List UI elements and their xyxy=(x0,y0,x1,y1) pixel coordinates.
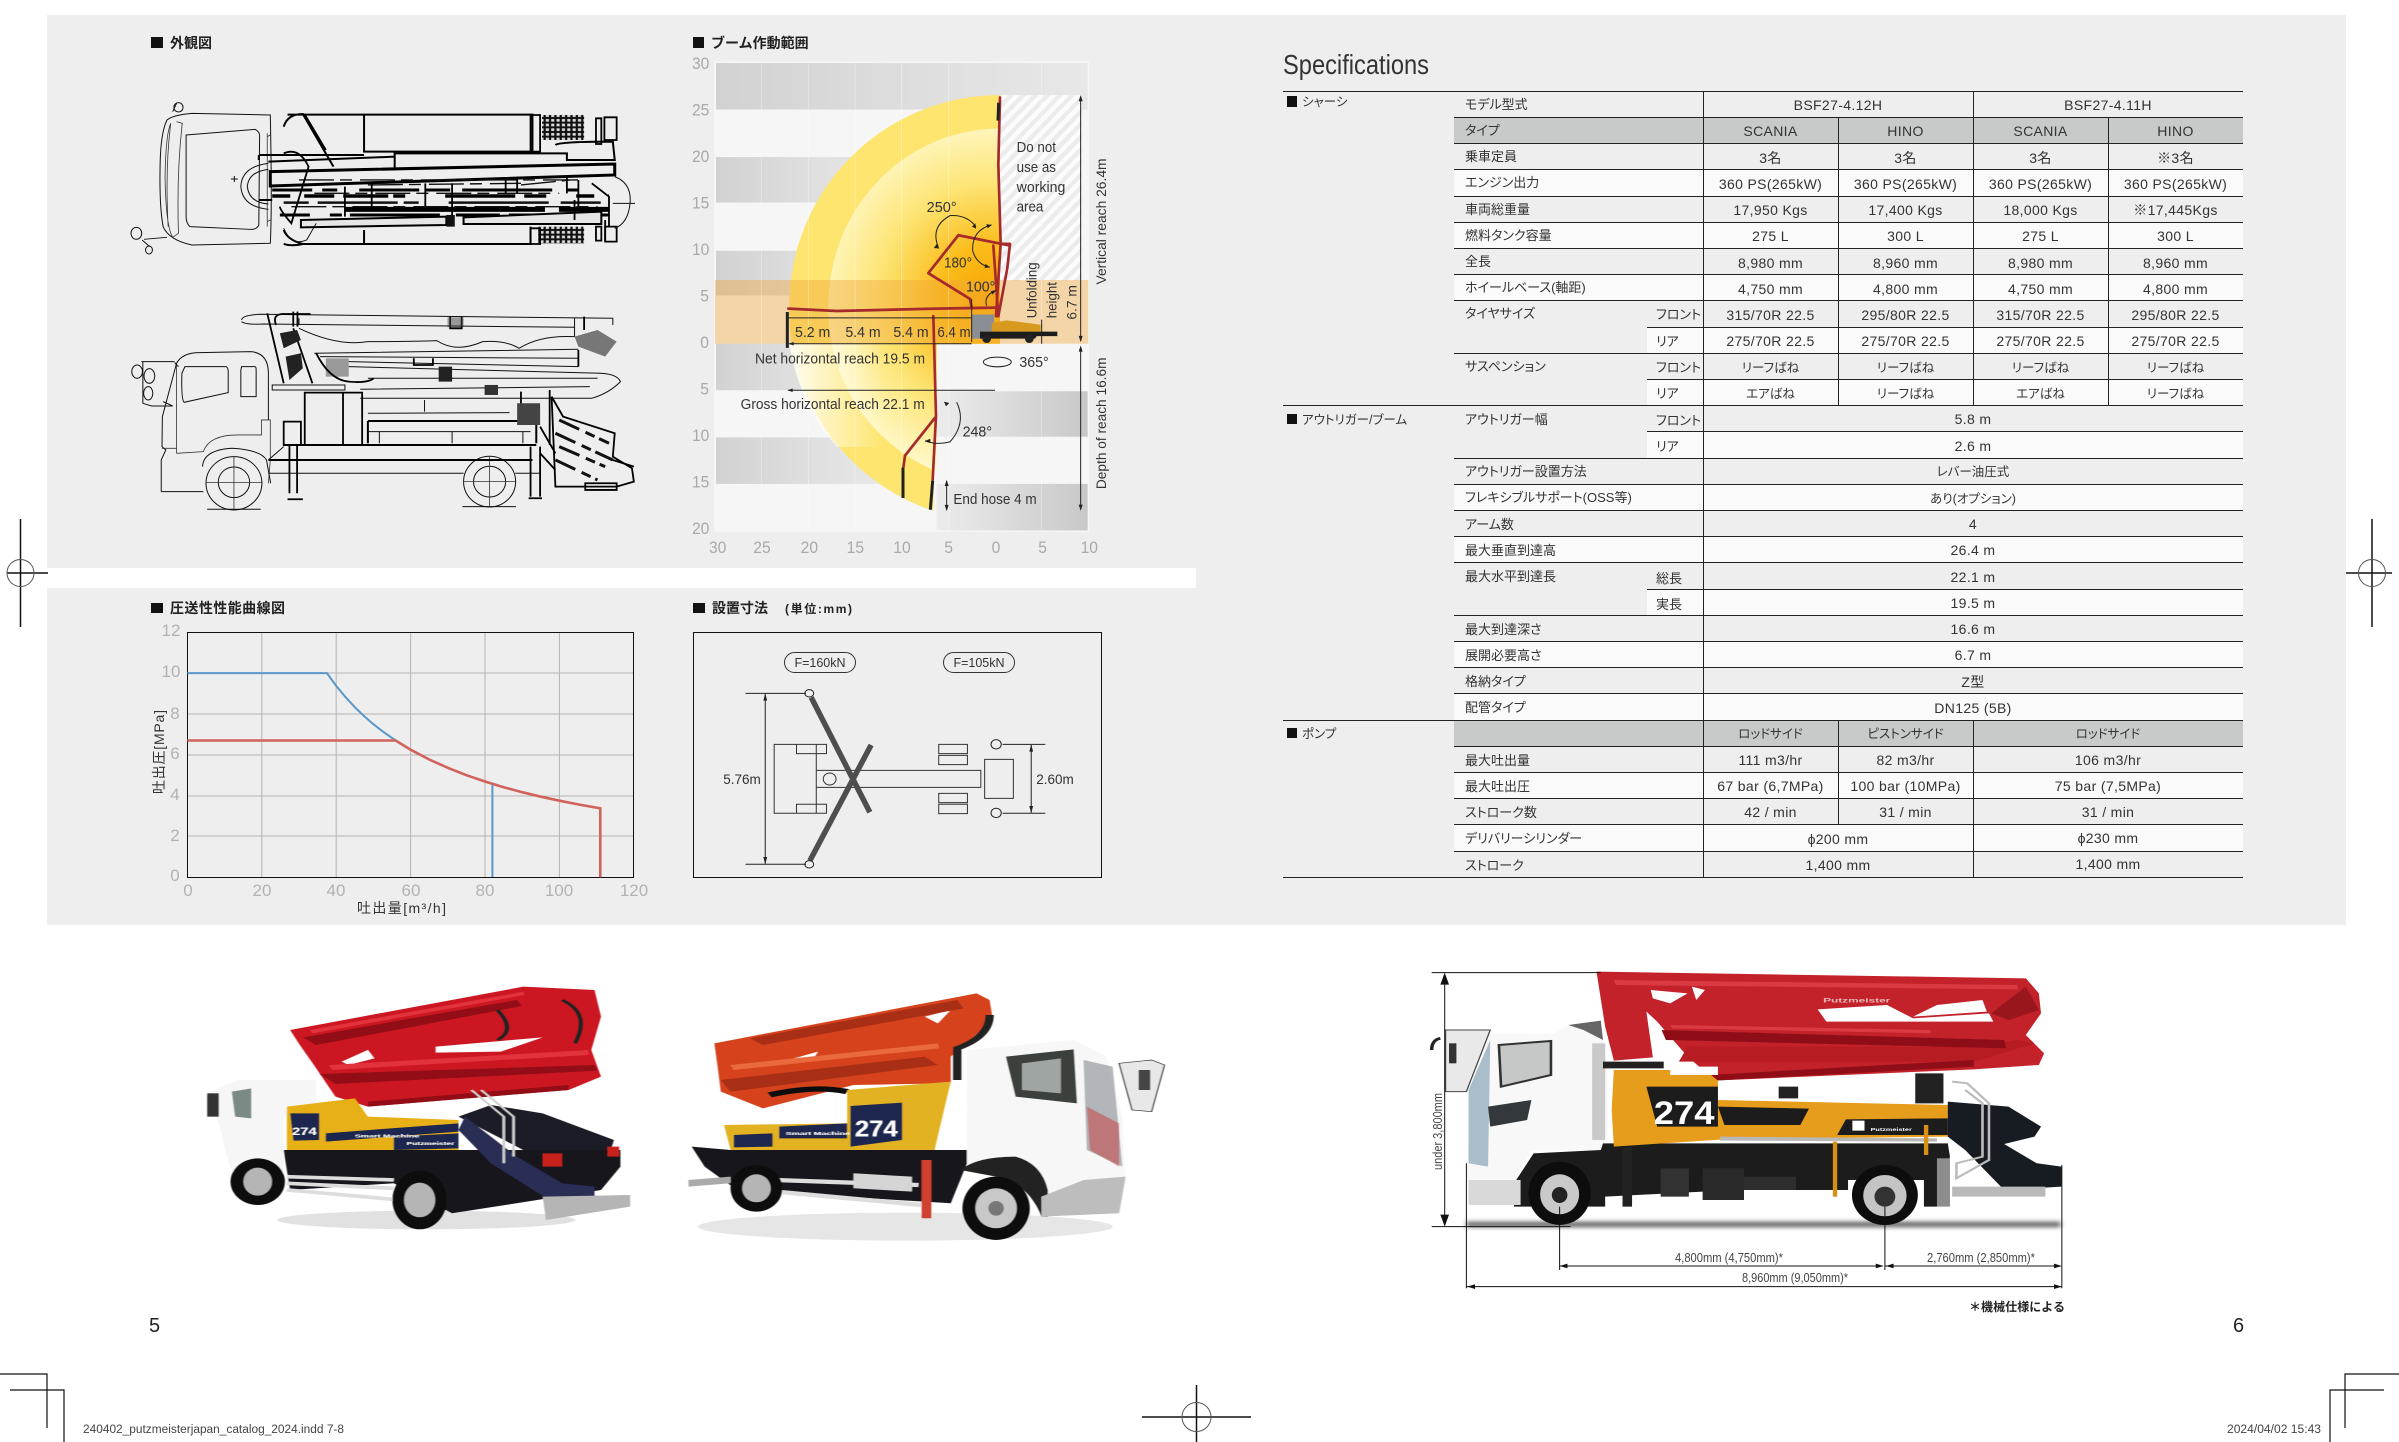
chassis values: リーフばね xyxy=(1877,361,1935,375)
pump values: ϕ230 mm xyxy=(2078,830,2138,846)
category: outrigger and boom: アウトリガー/ブーム xyxy=(1302,412,1407,427)
orange body xyxy=(1612,1070,1948,1147)
row labels: リア xyxy=(1656,386,1679,401)
panel: outrigger setup dimensions xyxy=(693,600,1102,878)
red boom arms xyxy=(1596,972,2044,1081)
print slug: file name: 240402_putzmeisterjapan_catalog_2024.indd 7-8 xyxy=(83,1424,344,1436)
boom diagram labels: working xyxy=(1016,180,1065,196)
label: rear overhang: 2,760mm (2,850mm)* xyxy=(1927,1251,2035,1265)
x axis numbers: 80 xyxy=(476,881,494,900)
panel: boom working range xyxy=(692,35,1110,557)
boom diagram y axis: 25 xyxy=(692,102,710,119)
photo: truck front three-quarter view: 274 xyxy=(855,1115,898,1142)
boom diagram y axis: 20 xyxy=(692,149,710,166)
chassis values: 300 L xyxy=(1887,228,1924,244)
pump values: 31 / min xyxy=(2082,804,2134,820)
curve: piston side blue xyxy=(187,673,492,877)
label: front force xyxy=(784,652,856,672)
truck image: Putzmeister xyxy=(1871,1128,1913,1133)
pump values: ピストンサイド xyxy=(1867,727,1944,741)
boom diagram y axis: 15 xyxy=(692,195,710,212)
boom diagram x axis: 25 xyxy=(753,540,771,557)
row labels: 実長 xyxy=(1656,597,1682,612)
boom diagram y axis: 5 xyxy=(700,381,709,398)
category: chassis: シャーシ xyxy=(1302,95,1348,109)
orange unfolding band xyxy=(715,280,1088,344)
print slug: date: 2024/04/02 15:43 xyxy=(2227,1424,2321,1436)
chassis values: エアばね xyxy=(1746,387,1795,401)
pump values: ϕ200 mm xyxy=(1808,831,1868,847)
outrigger and boom values: レバー油圧式 xyxy=(1937,465,2010,479)
outrigger and boom values: Z型 xyxy=(1961,674,1985,690)
outrigger and boom values: あり(オプション) xyxy=(1930,492,2016,506)
chassis values: 4,800 mm xyxy=(2143,281,2208,297)
chassis values: 275 L xyxy=(1752,228,1789,244)
chassis values: 275/70R 22.5 xyxy=(1861,333,1950,349)
row labels: タイヤサイズ xyxy=(1465,306,1536,321)
chassis values: 315/70R 22.5 xyxy=(1996,307,2085,323)
outrigger and boom values: 5.8 m xyxy=(1955,411,1991,427)
chassis values: SCANIA xyxy=(1743,123,1798,139)
truck image xyxy=(1432,972,2061,1227)
row labels: ストローク xyxy=(1465,858,1524,873)
crop marks bottom left xyxy=(0,1374,64,1442)
boom diagram labels: Depth of reach 16.6m xyxy=(1094,358,1110,489)
drawing: truck side view xyxy=(132,312,634,510)
boom diagram labels: Do not xyxy=(1017,140,1056,156)
x axis numbers: 0 xyxy=(183,881,193,900)
white cab xyxy=(206,1080,316,1187)
yellow body xyxy=(287,1098,459,1152)
note: depends on machine spec: ＊機械仕様による xyxy=(1969,1299,2065,1314)
chassis values: 3名 xyxy=(1894,150,1917,166)
boom diagram x axis: 15 xyxy=(847,540,864,557)
chassis values: 4,750 mm xyxy=(2008,281,2073,297)
row labels: ホイールベース(軸距) xyxy=(1465,280,1586,295)
row labels: 最大到達深さ xyxy=(1465,622,1542,637)
table rules xyxy=(1283,91,2243,878)
boom diagram labels: 248° xyxy=(963,425,992,441)
mini truck xyxy=(972,314,1057,343)
y axis numbers: 10 xyxy=(162,662,180,681)
row labels: 車両総重量 xyxy=(1465,202,1530,217)
photo: truck rear three-quarter view xyxy=(206,987,630,1229)
chassis values: BSF27-4.12H xyxy=(1794,97,1882,113)
y axis numbers: 2 xyxy=(170,826,180,845)
x axis numbers: 100 xyxy=(545,881,573,900)
row labels: 格納タイプ xyxy=(1465,674,1526,689)
label: height: under 3,800mm xyxy=(1430,1093,1445,1170)
y axis numbers: 12 xyxy=(162,621,180,640)
reach measurement lines xyxy=(787,95,1083,511)
chassis values: 275/70R 22.5 xyxy=(1996,333,2085,349)
y axis numbers: 6 xyxy=(170,744,180,763)
outrigger and boom values: 16.6 m xyxy=(1951,621,1995,637)
chassis values xyxy=(1719,97,2227,401)
x axis numbers xyxy=(183,881,648,900)
label: rear force: F=105kN xyxy=(953,656,1005,670)
boom diagram labels: 180° xyxy=(944,255,972,271)
rotation arrows xyxy=(925,216,1011,443)
chassis values: 3名 xyxy=(2029,150,2052,166)
boom diagram x axis: 0 xyxy=(992,540,1000,557)
category: pump xyxy=(1287,727,1337,741)
frame xyxy=(694,632,1102,878)
heading: exterior view: 外観図 xyxy=(170,35,212,51)
row labels: サスペンション xyxy=(1465,359,1546,374)
boom diagram x axis: 10 xyxy=(893,540,911,557)
boom diagram labels: Unfolding xyxy=(1025,262,1041,318)
boom diagram x axis: 20 xyxy=(801,540,818,557)
boom diagram x axis: 30 xyxy=(709,540,727,557)
chassis xyxy=(692,1147,967,1203)
tank and outrigger xyxy=(1703,1168,1744,1200)
page number left: 5 xyxy=(149,1315,160,1337)
boom diagram y axis: 5 xyxy=(700,288,709,305)
chassis values: 360 PS(265kW) xyxy=(2124,176,2227,192)
boom diagram labels: 6.7 m xyxy=(1065,285,1081,320)
x axis numbers: 60 xyxy=(402,881,420,900)
boom diagram labels: Gross horizontal reach 22.1 m xyxy=(741,397,925,413)
photo: truck side view with dimensions xyxy=(1430,972,2065,1314)
chassis values: ※17,445Kgs xyxy=(2133,202,2218,218)
red boom xyxy=(290,987,601,1107)
label: front width: 5.76m xyxy=(723,772,761,787)
x axis numbers: 40 xyxy=(327,881,345,900)
chassis values: 8,980 mm xyxy=(2008,255,2073,271)
y axis numbers: 0 xyxy=(170,866,180,885)
pump values: 31 / min xyxy=(1879,804,1932,820)
y axis numbers xyxy=(162,621,180,885)
wheel arch and chassis xyxy=(1514,1143,1950,1207)
chassis values: 18,000 Kgs xyxy=(2003,202,2078,218)
row labels: ストローク数 xyxy=(1465,805,1537,820)
boom diagram labels: 100° xyxy=(966,279,995,295)
panel: pressure performance curve xyxy=(151,600,648,916)
panel: grey upper background xyxy=(47,15,2346,925)
pump values: ロッドサイド xyxy=(1738,727,1803,741)
row labels: 燃料タンク容量 xyxy=(1465,228,1552,243)
chassis values: 295/80R 22.5 xyxy=(2131,307,2220,323)
chassis values: 8,980 mm xyxy=(1738,255,1803,271)
pump values: 42 / min xyxy=(1744,804,1797,820)
chassis values: 315/70R 22.5 xyxy=(1726,307,1815,323)
row labels: 全長 xyxy=(1465,254,1491,269)
x axis numbers: 20 xyxy=(253,881,271,900)
boom diagram labels: 5.4 m xyxy=(893,325,929,341)
truck image: Putzmeister xyxy=(1823,997,1890,1004)
boom diagram x axis: 5 xyxy=(1038,540,1047,557)
diagram: truck outrigger plan xyxy=(745,690,1045,868)
pump values xyxy=(1717,727,2161,873)
yellow reach envelope xyxy=(789,95,1000,511)
truck image: 274 xyxy=(1654,1096,1714,1132)
hopper and chassis xyxy=(459,1105,614,1150)
boom diagram labels: height xyxy=(1045,282,1061,318)
chassis values: 295/80R 22.5 xyxy=(1861,307,1950,323)
boom diagram x axis xyxy=(709,540,1098,557)
row labels: アウトリガー設置方法 xyxy=(1465,464,1587,479)
row labels: フロント xyxy=(1656,360,1701,375)
pump values: 75 bar (7,5MPa) xyxy=(2055,778,2161,794)
chassis values: 275/70R 22.5 xyxy=(1726,333,1815,349)
outrigger and boom values: DN125 (5B) xyxy=(1934,700,2012,716)
boom diagram x axis: 5 xyxy=(944,540,953,557)
wheels xyxy=(231,1158,285,1205)
row labels: アウトリガー幅 xyxy=(1465,412,1548,427)
photo: truck rear three-quarter view: 274 xyxy=(292,1125,317,1138)
table row shading xyxy=(1454,117,2243,851)
pump values: 100 bar (10MPa) xyxy=(1850,778,1961,794)
chart: discharge pressure vs output xyxy=(151,621,648,916)
row labels: フレキシブルサポート(OSS等) xyxy=(1465,490,1632,505)
boom diagram labels: Net horizontal reach 19.5 m xyxy=(755,351,925,367)
chassis values: 17,400 Kgs xyxy=(1868,202,1943,218)
row labels: 展開必要高さ xyxy=(1465,648,1542,663)
wheels xyxy=(1528,1162,1591,1225)
chassis values: 275 L xyxy=(2022,228,2059,244)
rear hopper xyxy=(1948,1102,2061,1190)
row labels: エンジン出力 xyxy=(1465,175,1539,190)
orange boom xyxy=(714,993,993,1108)
boom diagram y axis: 15 xyxy=(692,474,710,491)
category: pump: ポンプ xyxy=(1302,727,1337,741)
chart: boom reach diagram xyxy=(692,56,1110,557)
hatched no-work area xyxy=(1000,95,1082,281)
outrigger and boom values: 26.4 m xyxy=(1951,542,1995,558)
chassis values: HINO xyxy=(1887,123,1924,139)
chassis values: BSF27-4.11H xyxy=(2064,97,2152,113)
row labels: 最大吐出圧 xyxy=(1465,779,1530,794)
yellow body xyxy=(724,1082,951,1150)
label: wheelbase: 4,800mm (4,750mm)* xyxy=(1675,1251,1783,1265)
boom diagram y axis xyxy=(692,56,710,538)
outrigger and boom values: 19.5 m xyxy=(1951,595,1995,611)
heading: boom working range: ブーム作動範囲 xyxy=(711,35,809,51)
boom diagram y axis: 30 xyxy=(692,56,710,73)
boom diagram y axis: 10 xyxy=(692,428,710,445)
row labels: 最大吐出量 xyxy=(1465,753,1530,768)
chassis values: 300 L xyxy=(2157,228,2194,244)
chassis values: リーフばね xyxy=(1877,387,1935,401)
y axis numbers: 8 xyxy=(170,704,180,723)
chassis values: 8,960 mm xyxy=(1873,255,1938,271)
boom diagram labels: 5.2 m xyxy=(795,325,830,341)
pump values: 1,400 mm xyxy=(1805,857,1871,873)
outrigger and boom values: 6.7 m xyxy=(1955,647,1991,663)
boom diagram labels: Vertical reach 26.4m xyxy=(1094,158,1110,284)
white cab xyxy=(967,1040,1126,1217)
crop marks bottom right xyxy=(2330,1374,2399,1442)
pump values: 67 bar (6,7MPa) xyxy=(1717,778,1824,794)
chassis values: リーフばね xyxy=(2012,361,2070,375)
boom diagram labels: 6.4 m xyxy=(937,325,971,341)
outrigger and boom values: 4 xyxy=(1969,516,1977,532)
boom diagram labels xyxy=(741,140,1110,508)
x axis numbers: 120 xyxy=(620,881,648,900)
photo: truck front three-quarter view: Smart Machine xyxy=(786,1130,850,1136)
row labels: 最大水平到達長 xyxy=(1465,569,1556,584)
chassis values: 4,750 mm xyxy=(1738,281,1803,297)
title: Specifications: Specifications xyxy=(1283,49,1429,80)
axis title: pressure: 吐出圧[MPa] xyxy=(151,710,167,794)
row labels: アーム数 xyxy=(1465,517,1514,532)
row labels: リア xyxy=(1656,334,1679,349)
table: specifications xyxy=(1283,91,2243,878)
row labels: デリバリーシリンダー xyxy=(1465,831,1582,846)
boom diagram labels: use as xyxy=(1017,160,1056,176)
chassis values: 3名 xyxy=(1759,150,1782,166)
row labels: モデル型式 xyxy=(1465,97,1528,112)
heading: setup dimensions xyxy=(693,600,852,616)
chassis values: リーフばね xyxy=(2147,361,2205,375)
chassis values: リーフばね xyxy=(1742,361,1800,375)
photo: truck rear three-quarter view: Putzmeister xyxy=(407,1142,455,1146)
boom diagram y axis: 20 xyxy=(692,521,710,538)
chassis values: 4,800 mm xyxy=(1873,281,1938,297)
pump values: 82 m3/hr xyxy=(1876,752,1935,768)
pump values: 106 m3/hr xyxy=(2075,752,2141,768)
row labels: 総長 xyxy=(1656,571,1682,586)
row labels: タイプ xyxy=(1465,123,1500,138)
outrigger and boom values: 2.6 m xyxy=(1955,438,1991,454)
dimension lines xyxy=(1432,973,2062,1289)
row labels xyxy=(1465,97,1701,873)
boom diagram labels: 250° xyxy=(927,200,957,216)
pump values: 111 m3/hr xyxy=(1738,752,1803,768)
chassis values: リーフばね xyxy=(2147,387,2205,401)
boom arms extended and folded xyxy=(787,97,1010,510)
label: rear width: 2.60m xyxy=(1036,772,1074,787)
chassis values: 8,960 mm xyxy=(2143,255,2208,271)
chassis values: 360 PS(265kW) xyxy=(1854,176,1957,192)
registration mark left xyxy=(7,519,48,627)
chassis values: 275/70R 22.5 xyxy=(2131,333,2220,349)
photo: truck rear three-quarter view: Smart Machine xyxy=(355,1133,419,1139)
chassis values: ※3名 xyxy=(2157,150,2194,166)
boom diagram labels: area xyxy=(1017,199,1043,216)
curve: rod side red xyxy=(187,740,600,877)
row labels: フロント xyxy=(1656,307,1701,322)
boom diagram labels: 365° xyxy=(1019,355,1049,371)
chassis values: 360 PS(265kW) xyxy=(1719,176,1822,192)
page number right: 6 xyxy=(2233,1315,2244,1337)
registration mark right xyxy=(2346,519,2392,627)
heading: pressure curve: 圧送性性能曲線図 xyxy=(170,600,285,616)
row labels: リア xyxy=(1656,439,1679,454)
row labels: 乗車定員 xyxy=(1465,149,1517,164)
heading: exterior view xyxy=(151,35,212,51)
chassis values: エアばね xyxy=(2016,387,2065,401)
outrigger and boom values: 22.1 m xyxy=(1951,569,1995,585)
boom diagram y axis: 10 xyxy=(692,242,710,259)
panel: exterior drawings xyxy=(131,35,635,510)
pump values: 1,400 mm xyxy=(2075,856,2141,872)
boom diagram y axis: 0 xyxy=(700,335,709,352)
wheels xyxy=(731,1165,782,1212)
heading: setup dimensions: (単位:mm) xyxy=(785,601,852,616)
boom diagram x axis: 10 xyxy=(1081,540,1098,557)
label: overall length: 8,960mm (9,050mm)* xyxy=(1742,1271,1848,1285)
boom diagram labels: End hose 4 m xyxy=(953,492,1037,508)
photo: truck front three-quarter view xyxy=(688,993,1165,1241)
row labels: フロント xyxy=(1656,413,1701,428)
chassis values: 17,950 Kgs xyxy=(1733,202,1808,218)
registration mark bottom xyxy=(1142,1385,1251,1442)
white cab xyxy=(1466,1021,1607,1205)
label: rear force xyxy=(944,652,1014,672)
label: front force: F=160kN xyxy=(794,656,846,670)
y axis numbers: 4 xyxy=(170,785,180,804)
row labels: 最大垂直到達高 xyxy=(1465,543,1556,558)
outrigger and boom values xyxy=(1930,411,2016,716)
chassis values: HINO xyxy=(2157,123,2194,139)
axis title: output: 吐出量[m³/h] xyxy=(357,900,446,916)
drawing: truck top view xyxy=(131,103,635,254)
pump values: ロッドサイド xyxy=(2076,727,2140,741)
chassis values: SCANIA xyxy=(2013,123,2068,139)
boom diagram labels: 5.4 m xyxy=(845,325,881,341)
heading: setup dimensions: 設置寸法 xyxy=(712,600,768,616)
chassis values: 360 PS(265kW) xyxy=(1989,176,2092,192)
row labels: 配管タイプ xyxy=(1465,700,1526,715)
